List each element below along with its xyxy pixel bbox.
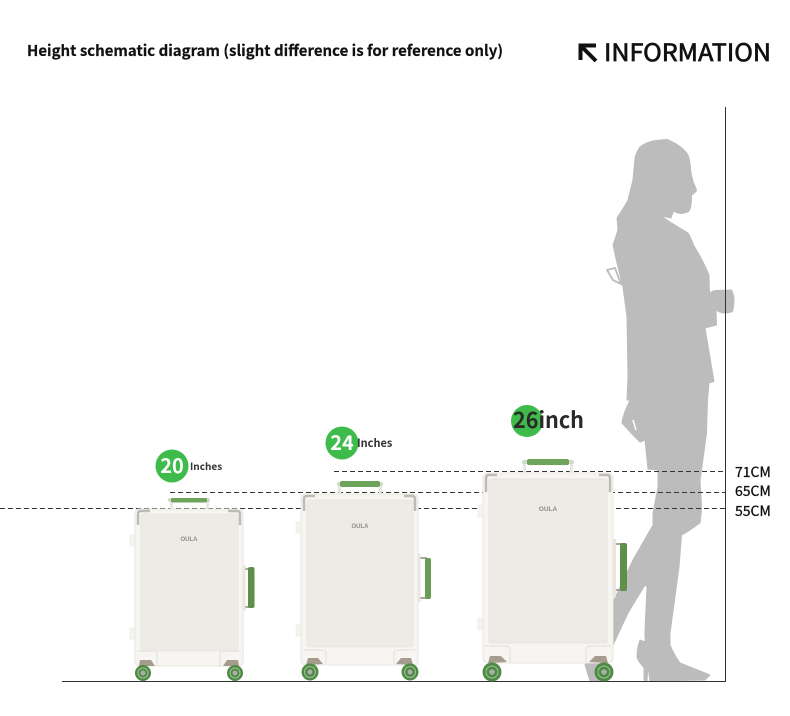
logo: OULA	[352, 524, 369, 530]
panel	[141, 514, 238, 651]
bumper	[485, 646, 611, 662]
top handle	[337, 481, 383, 494]
side handle	[243, 565, 254, 611]
vertical height line	[724, 107, 726, 682]
side handle	[418, 554, 431, 602]
suitcase 20 inch	[130, 498, 254, 681]
size badge 20 inches: 20	[160, 450, 184, 479]
top handle	[168, 498, 210, 510]
size badge 20 inches: Inches	[190, 458, 222, 473]
panel	[307, 500, 413, 647]
ground line	[62, 680, 726, 682]
person silhouette	[585, 140, 734, 681]
size badge 24 inches: Inches	[357, 435, 393, 451]
wheels	[135, 660, 243, 681]
size badge 24 inches	[326, 426, 393, 460]
icon: information arrow	[580, 46, 596, 61]
title: Height schematic diagram (slight difference is for reference only)	[27, 40, 503, 61]
size badge 20 inches	[156, 450, 222, 482]
size badge 26 inch: 26inch	[513, 403, 584, 435]
bumper	[304, 650, 415, 664]
wheels	[302, 658, 418, 680]
logo: OULA	[180, 537, 198, 543]
latches	[296, 522, 301, 636]
panel	[489, 479, 607, 643]
label 65cm: 65CM	[735, 481, 771, 501]
label 55cm: 55CM	[735, 501, 771, 521]
bumper	[137, 651, 241, 666]
body	[483, 473, 613, 663]
corners	[138, 511, 240, 525]
logo: OULA	[539, 506, 558, 513]
side handle	[613, 539, 627, 597]
dashed line 65cm	[170, 492, 725, 494]
wheels	[482, 656, 614, 682]
corners	[486, 475, 610, 492]
information heading: INFORMATION	[604, 33, 771, 68]
label 71cm: 71CM	[735, 462, 771, 482]
dashed line 71cm	[334, 470, 725, 472]
latches	[478, 505, 483, 630]
corners	[304, 496, 415, 511]
suitcase 26 inch	[478, 459, 627, 682]
dashed line 55cm	[0, 508, 725, 510]
size badge 24 inches: 24	[330, 427, 354, 456]
top handle	[522, 459, 574, 473]
suitcase 24 inch	[296, 481, 431, 680]
body	[135, 509, 243, 666]
latches	[130, 535, 135, 639]
body	[301, 494, 418, 665]
